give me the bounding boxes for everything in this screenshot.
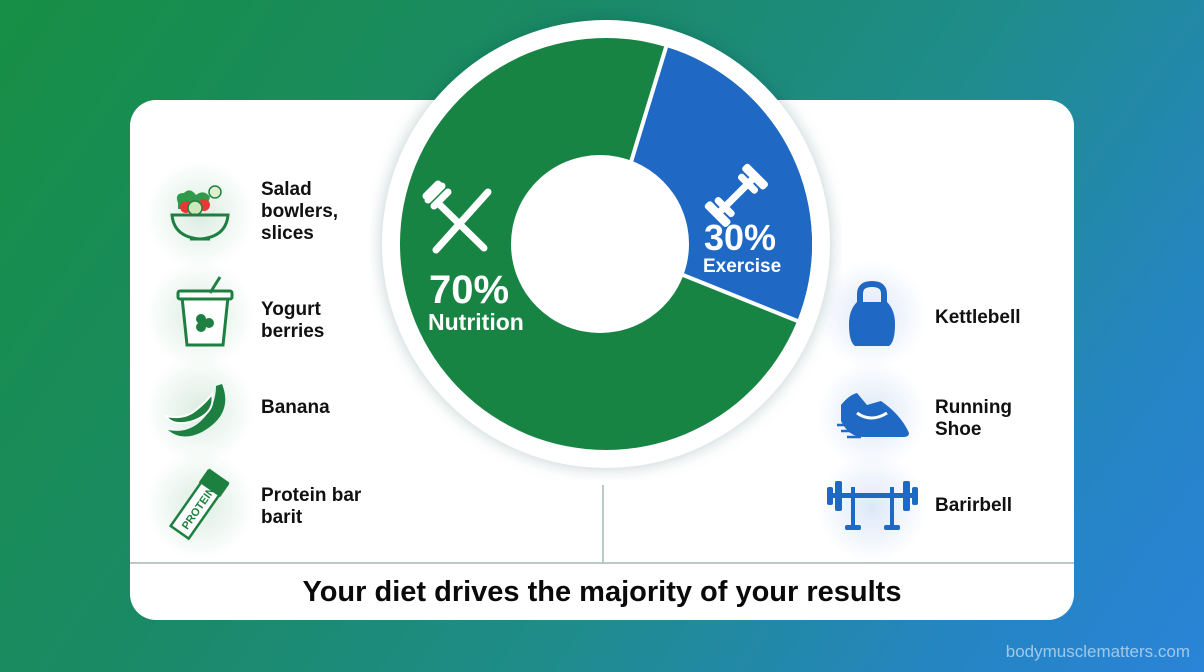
icon: kettlebell: [849, 281, 895, 346]
icon: protein bar: PROTEIN: [180, 485, 218, 532]
text: running shoe: [935, 397, 1012, 440]
icon: yogurt: [176, 276, 234, 346]
text: protein bar: barit: [261, 507, 302, 528]
text: kettlebell: Kettlebell: [935, 307, 1021, 328]
text: 30% exercise: 30%: [704, 217, 776, 258]
divider: horizontal: [130, 562, 1074, 564]
text: protein bar: Protein bar: [261, 485, 361, 506]
text: barbell: Barirbell: [935, 495, 1012, 516]
text: 30% exercise: Exercise: [703, 256, 781, 277]
icon: banana: [164, 384, 226, 436]
text: banana: Banana: [261, 397, 330, 418]
text: salad: slices: [261, 223, 314, 244]
text: watermark: bodymusclematters.com: [1006, 642, 1190, 661]
panel: exercise list: [827, 274, 1021, 550]
text: 30% exercise: [703, 217, 781, 277]
text: salad: [261, 179, 338, 244]
text: running shoe: Shoe: [935, 419, 981, 440]
divider: vertical: [602, 485, 604, 563]
icon: dumbbell: [703, 162, 769, 228]
icon: running shoe: [837, 393, 909, 438]
text: yogurt: [261, 299, 324, 342]
text: salad: bowlers,: [261, 201, 338, 222]
text: footer headline: Your diet drives the majority of your results: [303, 576, 901, 608]
text: 70% nutrition: 70%: [429, 268, 509, 312]
panel: main card: [130, 100, 1074, 620]
text: yogurt: berries: [261, 321, 324, 342]
text: 70% nutrition: Nutrition: [428, 309, 524, 335]
icon: salad bowl: [170, 185, 230, 240]
text: protein bar: [261, 485, 361, 528]
chart: donut 70/30: [374, 18, 838, 476]
text: yogurt: Yogurt: [261, 299, 321, 320]
icon: barbell: [827, 481, 918, 530]
text: running shoe: Running: [935, 397, 1012, 418]
icon: fork and knife: [426, 184, 488, 250]
panel: nutrition list: [158, 173, 361, 548]
text: 70% nutrition: [428, 268, 524, 335]
icon: protein bar: [169, 468, 230, 540]
text: salad: Salad: [261, 179, 312, 200]
